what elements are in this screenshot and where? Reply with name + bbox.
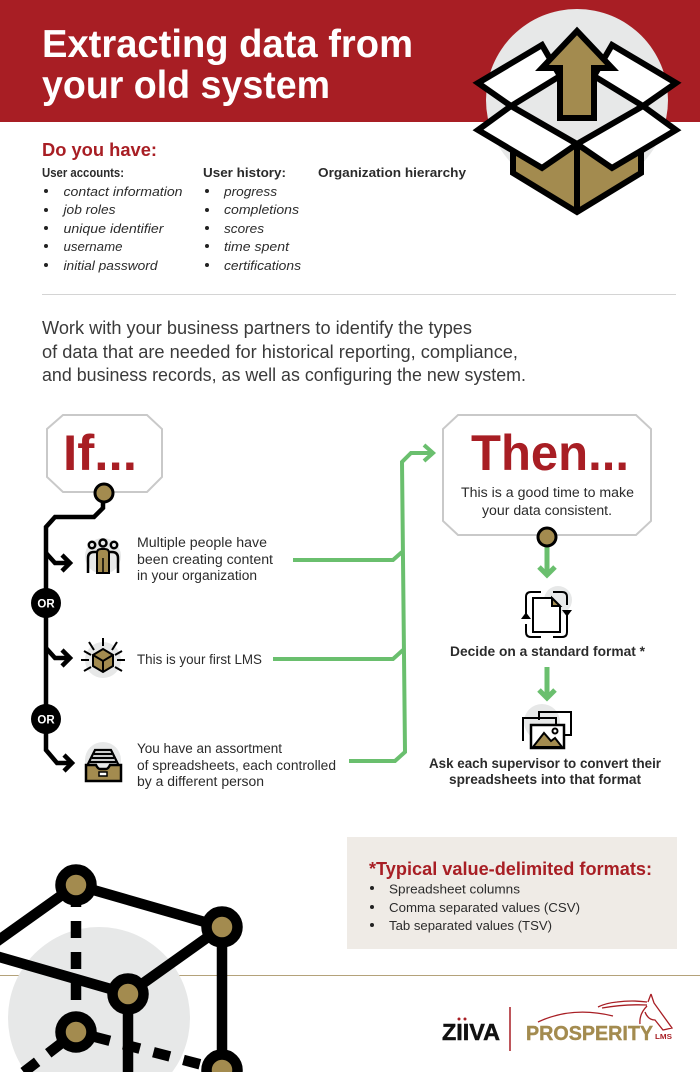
list: user accounts: username [64, 239, 122, 254]
list: user accounts: User accounts: [42, 165, 124, 180]
text: multiple people: Multiple people have [137, 535, 267, 550]
if connector node [95, 484, 113, 502]
list: user history: User history: [203, 165, 286, 180]
title [42, 23, 413, 107]
text: multiple people [137, 535, 273, 583]
intro paragraph: Work with your business partners to identify the types [42, 318, 472, 338]
icon: wireframe cube [0, 870, 238, 1072]
or badge 1: OR [37, 598, 55, 610]
list: user history: time spent [224, 239, 290, 254]
label: organization hierarchy: Organization hierarchy [318, 165, 467, 180]
panel: typical formats: Comma separated values (CSV) [389, 900, 580, 915]
if box: If... [63, 425, 137, 481]
list: user accounts: unique identifier [64, 221, 164, 236]
logo: ziiva: ZIIVA [442, 1019, 500, 1045]
text: multiple people: in your organization [137, 568, 257, 583]
icon: document conversion [523, 586, 572, 637]
logo: prosperity lms: LMS [655, 1034, 672, 1041]
header band [0, 0, 700, 122]
green connector lines [273, 445, 433, 761]
or badge 2 [31, 704, 61, 734]
icon: glowing cube [81, 638, 125, 678]
text: spreadsheets: You have an assortment [137, 741, 282, 756]
section heading: do you have: Do you have: [42, 140, 157, 160]
panel: typical formats [347, 837, 677, 949]
text: multiple people: been creating content [137, 552, 273, 567]
list: user history: scores [224, 221, 265, 236]
text: spreadsheets: by a different person [137, 774, 264, 789]
then box: This is a good time to make [461, 485, 634, 500]
then box: Then... [471, 425, 629, 481]
logo: prosperity lms: PROSPERITY [526, 1023, 654, 1045]
intro paragraph [42, 318, 526, 385]
then connector node [538, 528, 556, 546]
arrow: then to decide [539, 545, 555, 575]
step: ask each supervisor [429, 756, 662, 787]
step: decide on format: Decide on a standard format * [450, 644, 646, 659]
text: spreadsheets: of spreadsheets, each controlled [137, 758, 336, 773]
list: user accounts [42, 165, 182, 273]
list: user history [203, 165, 302, 273]
text: spreadsheets [137, 741, 336, 789]
then box [443, 415, 651, 535]
list: user history: progress [223, 184, 278, 199]
panel: typical formats: Tab separated values (TSV) [389, 918, 552, 933]
list: user accounts: initial password [64, 258, 158, 273]
or badge 1 [31, 588, 61, 618]
step: ask each supervisor: spreadsheets into that format [449, 772, 641, 787]
list: user accounts: job roles [61, 202, 116, 217]
then box: your data consistent. [482, 503, 612, 518]
black branching line with arrows [46, 500, 103, 771]
icon: file drawer [85, 742, 121, 781]
logo: prosperity lms [526, 994, 672, 1045]
icon: open box with up arrow [478, 9, 676, 212]
icon: stacked images [523, 704, 571, 748]
list: user accounts: contact information [64, 184, 182, 199]
text: first lms: This is your first LMS [137, 652, 262, 667]
list: user history: completions [224, 202, 300, 217]
intro paragraph: of data that are needed for historical reporting, compliance, [42, 342, 518, 362]
title: Extracting data from [42, 23, 413, 66]
title: your old system [42, 64, 330, 107]
if box [47, 415, 162, 492]
arrow: decide to ask [539, 667, 555, 698]
panel: typical formats: Spreadsheet columns [389, 882, 521, 896]
step: ask each supervisor: Ask each supervisor to convert their [429, 756, 662, 771]
or badge 2: OR [37, 714, 55, 726]
list: user history: certifications [224, 258, 302, 273]
icon: group of people [85, 538, 121, 574]
panel: typical formats: *Typical value-delimited formats: [369, 859, 652, 879]
intro paragraph: and business records, as well as configuring the new system. [42, 365, 526, 385]
